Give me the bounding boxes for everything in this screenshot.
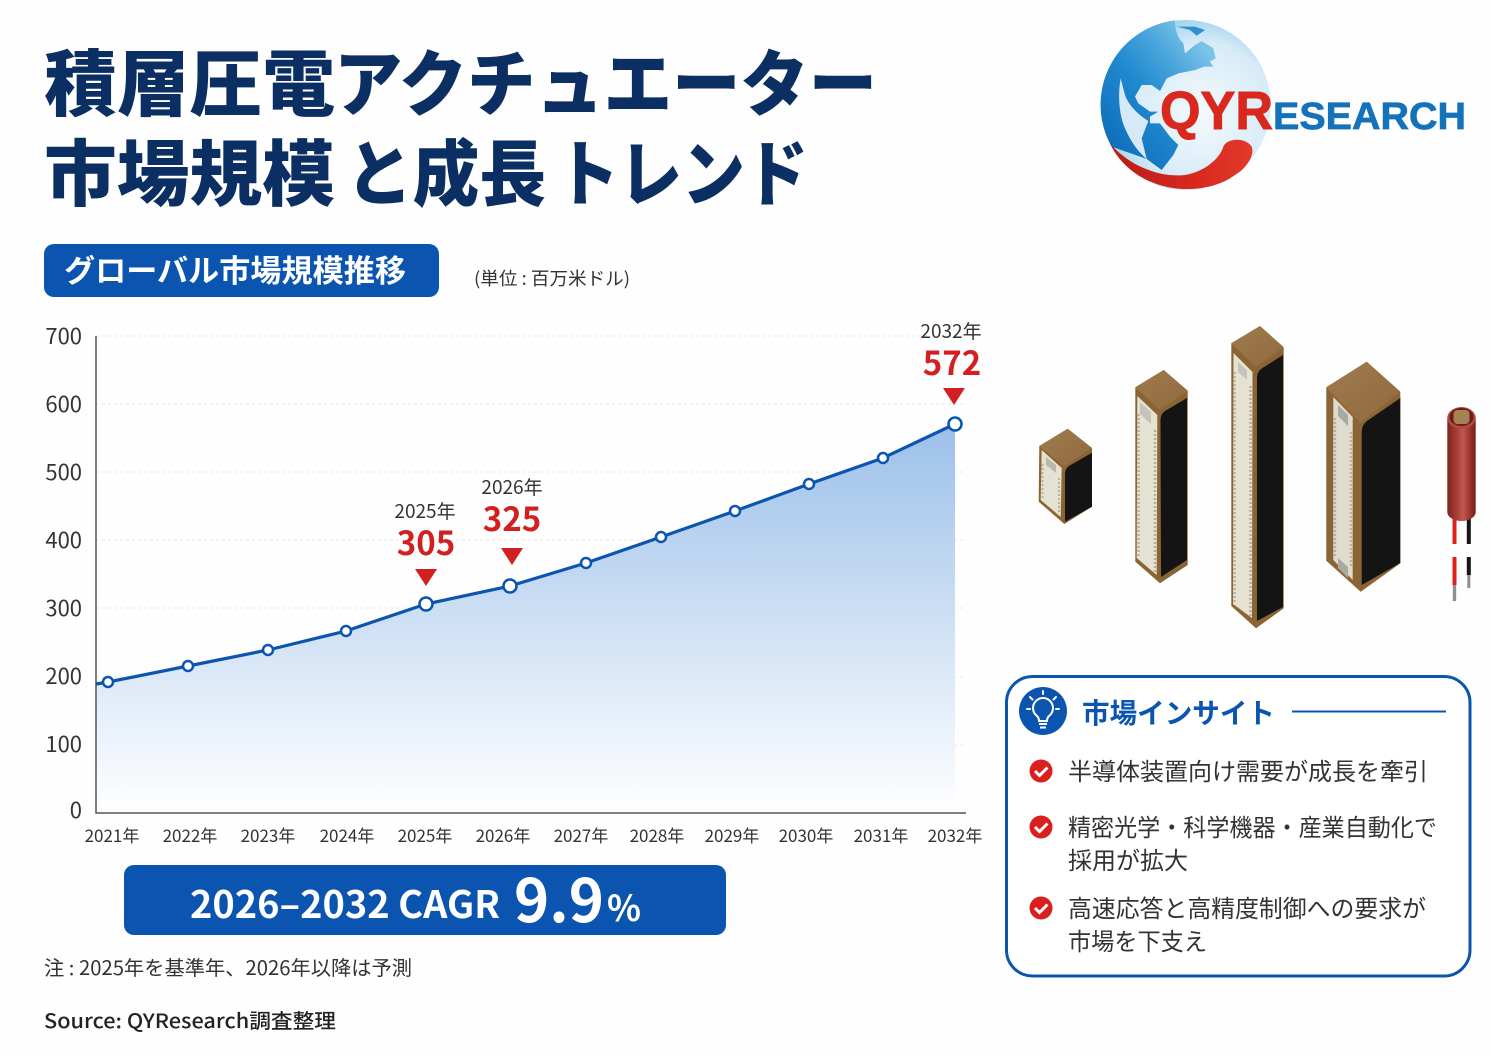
x axis labels: 2023年 [241, 822, 295, 847]
logo: QYResearch [1101, 20, 1466, 190]
x axis labels: 2027年 [554, 822, 608, 847]
x axis labels: 2025年 [398, 822, 452, 847]
logo wordmark: QYR [1160, 81, 1273, 141]
title line 2: 市場規模 [44, 116, 335, 221]
data line [96, 424, 955, 684]
y axis labels: 600 [45, 387, 82, 419]
data points [103, 418, 962, 687]
callout: 2025 [394, 497, 456, 586]
x axis labels: 2029年 [705, 822, 759, 847]
title line 2: トレンド [556, 116, 808, 221]
insight 2: 精密光学・科学機器・産業自動化で [1068, 808, 1437, 843]
callout: 2032: 2032年 [920, 317, 982, 344]
callout: 2032: 572 [923, 337, 981, 385]
insight 3: 市場を下支え [1068, 922, 1207, 957]
panel: market insights [1006, 676, 1470, 976]
y axis labels: 400 [45, 523, 82, 555]
y axis labels: 100 [45, 727, 82, 759]
actuator tallest [1231, 326, 1284, 628]
insight 3: 高速応答と高精度制御への要求が [1068, 889, 1426, 924]
y axis labels [45, 319, 82, 825]
y axis labels: 500 [45, 455, 82, 487]
y axis labels: 700 [45, 319, 82, 351]
callout: 2025: 2025年 [394, 497, 456, 524]
CAGR banner [124, 853, 726, 940]
panel heading: 市場インサイト [1082, 692, 1275, 732]
actuator medium tall [1135, 370, 1188, 583]
y axis labels: 200 [45, 659, 82, 691]
callout: 2032 [920, 317, 982, 405]
actuator small [1039, 429, 1092, 524]
unit label: (単位 : 百万米ドル) [474, 265, 630, 291]
x axis labels: 2028年 [630, 822, 684, 847]
insight 1: 半導体装置向け需要が成長を牽引 [1068, 752, 1428, 787]
callout: 2026 [481, 473, 543, 565]
x axis labels: 2032年 [928, 822, 982, 847]
line chart [45, 319, 982, 847]
area fill [96, 424, 955, 813]
CAGR banner: 9.9 [514, 853, 604, 940]
callout: 2025: 305 [397, 517, 455, 565]
cylindrical actuator with wires [1447, 407, 1476, 601]
note: 注 : 2025年を基準年、2026年以降は予測 [44, 952, 412, 981]
source: Source: QYResearch調査整理 [44, 1005, 336, 1034]
callout: 2026: 2026年 [481, 473, 543, 500]
title line 2: と成長 [346, 116, 546, 221]
product image: piezo stack actuators [1039, 326, 1476, 628]
callout: 2026: 325 [483, 493, 541, 541]
title [44, 26, 877, 221]
actuator wide [1326, 362, 1400, 592]
CAGR banner: % [607, 880, 641, 932]
insight 2 [1030, 808, 1437, 876]
gridlines [96, 336, 966, 745]
title line 1: アクチュエーター [334, 26, 877, 131]
title line 1: 積層圧電 [44, 26, 335, 131]
axes [96, 336, 966, 813]
heading rule [1292, 710, 1446, 712]
x axis labels: 2030年 [779, 822, 833, 847]
y axis labels: 300 [45, 591, 82, 623]
logo globe [1101, 20, 1271, 190]
insight 3 [1030, 889, 1426, 957]
logo wordmark 2: ESEARCH [1273, 96, 1466, 138]
insight 2: 採用が拡大 [1068, 841, 1188, 876]
x axis labels: 2031年 [854, 822, 908, 847]
y axis labels: 0 [70, 793, 82, 825]
x axis labels: 2026年 [476, 822, 530, 847]
section heading pill: グローバル市場規模推移 [64, 246, 406, 291]
x axis labels: 2021年 [85, 822, 139, 847]
CAGR banner: 2026–2032 CAGR [190, 874, 500, 929]
x axis labels [85, 822, 982, 847]
icon: light bulb [1019, 687, 1067, 735]
x axis labels: 2024年 [320, 822, 374, 847]
x axis labels: 2022年 [163, 822, 217, 847]
